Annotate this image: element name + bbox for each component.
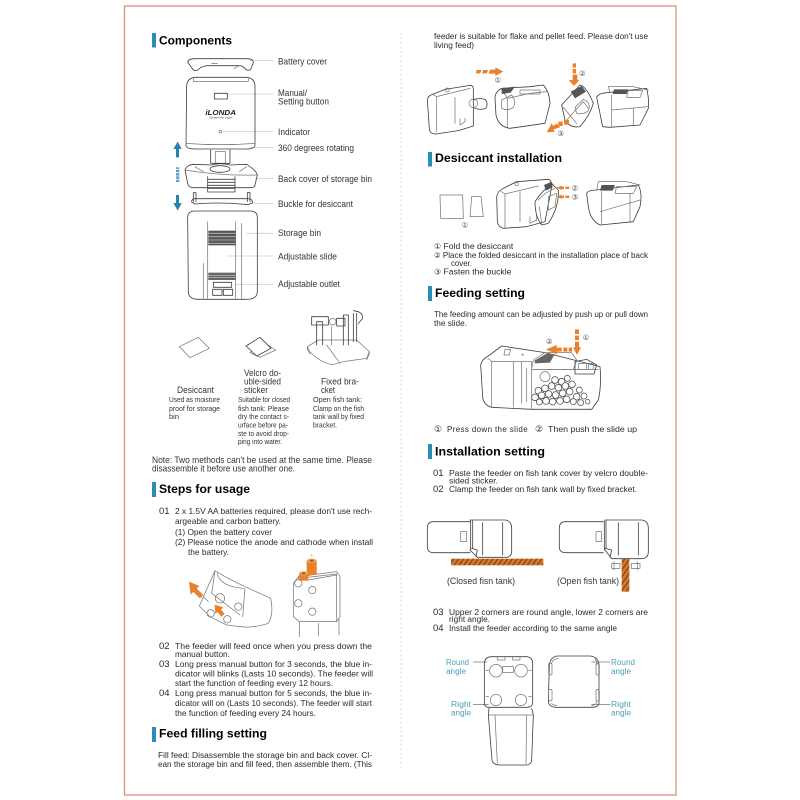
icon: batteries <box>295 553 317 581</box>
tank cover hatch <box>451 559 543 565</box>
arrows and step numbers <box>476 63 586 138</box>
steps 02 to 04 text: Long press manual button for 5 seconds, the blue in- <box>175 688 372 698</box>
arrows and step numbers: ① <box>495 76 501 85</box>
arrows and step numbers: ② <box>546 337 553 346</box>
heading: steps for usage: Steps for usage <box>159 482 250 496</box>
installation steps 03 and 04 text: Upper 2 corners are round angle, lower 2 corners are <box>449 607 648 617</box>
device assembled <box>587 182 641 225</box>
accessory: bracket text: Clamp on the fish <box>313 406 364 413</box>
angle labels left: angle <box>451 708 471 718</box>
icon: fixed bracket <box>307 311 369 365</box>
back cover part <box>185 164 257 192</box>
installation steps text: 01 <box>433 468 444 479</box>
device: cover tilted <box>562 85 593 127</box>
arrows and step numbers: ① <box>583 333 589 342</box>
component labels: Adjustable outlet <box>278 279 341 289</box>
diagram: installing batteries <box>293 553 340 637</box>
icon: orange arrows <box>189 582 225 617</box>
diagram: bracket frame with angles <box>548 656 610 707</box>
installation steps text: Paste the feeder on fish tank cover by velcro double- <box>449 468 648 478</box>
angle labels left: Round <box>446 657 469 667</box>
angle labels right: Round <box>611 657 635 667</box>
desiccant sheets <box>440 195 483 229</box>
arrows and step numbers: ③ <box>572 192 578 201</box>
feed filling text continued: feeder is suitable for flake and pellet feed. Please don't use <box>434 31 648 41</box>
feed pellets <box>532 375 590 406</box>
desiccant steps text: ③ Fasten the buckle <box>434 266 512 276</box>
device: assembled cover <box>597 87 649 127</box>
desiccant steps text: ① Fold the desiccant <box>434 241 514 251</box>
device: bin <box>427 85 487 134</box>
component labels: Indicator <box>278 127 310 137</box>
feeding steps text <box>434 424 637 434</box>
diagram: closed fish tank mounting <box>427 520 543 565</box>
icon: velcro sticker <box>246 337 276 357</box>
accessory: velcro text: uble-sided <box>244 376 281 386</box>
arrows and step numbers: ② <box>579 69 586 78</box>
heading: desiccant installation: Desiccant installation <box>435 151 562 165</box>
accessory: bracket text: cket <box>321 385 335 395</box>
accessories illustrations <box>179 311 369 365</box>
label: open tank: (Open fish tank) <box>557 576 619 586</box>
feed filling text continued <box>434 31 648 50</box>
steps 02 to 04 text: The feeder will feed once when you press down the <box>175 641 372 651</box>
icon: batteries: + <box>311 553 314 558</box>
note text <box>152 454 372 474</box>
accessory: velcro text: dry the contact s- <box>238 414 290 421</box>
feed filling text: ean the storage bin and fill feed, then assemble them. (This <box>158 759 372 769</box>
buckle part <box>192 193 253 205</box>
diagram: open fish tank mounting <box>559 520 648 592</box>
arrows and step numbers <box>557 183 578 201</box>
accessory: desiccant text: Used as moisture <box>169 397 220 404</box>
steps 02 to 04 text: dicator will blinks (Lasts 10 seconds). The feeder will <box>175 668 373 678</box>
step 01 text: 2 x 1.5V AA batteries required, please don't use rech- <box>175 506 372 516</box>
feeding setting text: The feeding amount can be adjusted by push up or pull down <box>434 309 648 319</box>
feed filling text continued: living feed) <box>434 40 474 50</box>
step 01 text: (1) Open the battery cover <box>175 527 272 537</box>
component labels: Back cover of storage bin <box>278 174 372 184</box>
desiccant sheets: ① <box>462 220 468 229</box>
feed filling text <box>158 750 372 769</box>
main body part <box>186 77 255 149</box>
accessory: velcro text: urface before pa- <box>238 422 289 430</box>
component labels: 360 degrees rotating <box>278 143 354 153</box>
heading: feed filling setting: Feed filling setting <box>159 726 267 740</box>
diagram: exploded view of feeder <box>173 59 273 299</box>
accessory: desiccant text: proof for storage <box>169 406 220 413</box>
accessory: desiccant text <box>169 385 220 421</box>
heading: components: Components <box>159 34 232 48</box>
angle labels left: angle <box>446 666 466 676</box>
angle labels left <box>446 657 472 718</box>
feeding steps text: ② <box>535 424 543 434</box>
steps 02 to 04 text: manual button. <box>175 649 230 659</box>
accessory: desiccant text: bin <box>169 414 179 421</box>
storage bin part <box>188 211 257 299</box>
step 01 text: 01 <box>159 506 170 517</box>
brand logo: Smart life style <box>209 116 233 120</box>
angle labels right <box>611 657 635 718</box>
installation steps 03 and 04 text <box>433 607 648 634</box>
installation steps text <box>433 468 648 495</box>
accessory: velcro text: sticker <box>244 385 268 395</box>
accessory: velcro text: Velcro do- <box>244 368 281 378</box>
component labels: Manual/ <box>278 88 308 98</box>
steps 02 to 04 text: Long press manual button for 3 seconds, the blue in- <box>175 659 372 669</box>
installation steps text: sided sticker. <box>449 476 498 486</box>
arrows and step numbers: ③ <box>557 129 564 138</box>
note text: Note: Two methods can't be used at the same time. Please <box>152 454 372 465</box>
heading: installation setting: Installation setting <box>435 444 545 458</box>
accessory: bracket text <box>313 376 364 430</box>
diagram: feeding slide cutaway <box>481 329 601 409</box>
angle labels right: angle <box>611 666 631 676</box>
installation steps text: Clamp the feeder on fish tank wall by fixed bracket. <box>449 484 637 494</box>
desiccant steps text <box>434 241 649 276</box>
diagram: opening battery cover <box>189 571 272 627</box>
feeding steps text: ① <box>434 424 442 434</box>
steps 02 to 04 text: dicator will on (Lasts 10 seconds). The feeder will start <box>175 698 373 708</box>
feeding steps text: Press down the slide <box>447 424 528 434</box>
brand logo: iLONDA <box>205 108 236 117</box>
device with desiccant <box>497 179 558 228</box>
step 01 text: argeable and carbon battery. <box>175 516 281 526</box>
diagram: feed filling sequence <box>427 63 649 138</box>
component labels <box>278 56 372 289</box>
steps 02 to 04 text: the function of feeding every 24 hours. <box>175 708 316 718</box>
icon: arrows up and down <box>173 142 182 211</box>
desiccant steps text: ② Place the folded desiccant in the installation place of back <box>434 250 649 260</box>
accessory: bracket text: bracket. <box>313 422 337 430</box>
component labels: Setting button <box>278 96 329 106</box>
label: closed tank: (Closed fisn tank) <box>447 576 515 586</box>
installation steps text: 02 <box>433 484 444 495</box>
icon: desiccant sheet <box>179 337 209 358</box>
battery cover part <box>188 59 253 71</box>
accessory: velcro text: ste to avoid drop- <box>238 431 290 438</box>
accessory: velcro text: fish tank: Please <box>238 406 289 413</box>
icon: batteries: - <box>295 567 297 572</box>
installation steps 03 and 04 text: 04 <box>433 623 444 634</box>
installation steps 03 and 04 text: right angle. <box>449 614 490 624</box>
installation steps 03 and 04 text: Install the feeder according to the same angle <box>449 623 617 633</box>
angle labels left: Right <box>451 699 472 709</box>
heading: feeding setting: Feeding setting <box>435 286 525 300</box>
diagram: back of feeder with angles <box>473 657 533 765</box>
diagram: desiccant installation <box>440 179 641 229</box>
accessory: velcro text <box>238 368 290 446</box>
component labels: Buckle for desiccant <box>278 199 354 209</box>
arrows and step numbers <box>546 329 589 355</box>
angle labels right: Right <box>611 699 632 709</box>
component labels: Adjustable slide <box>278 252 337 262</box>
feeding steps text: Then push the slide up <box>548 424 637 434</box>
arrows and step numbers: ② <box>572 183 578 192</box>
accessory: desiccant text: Desiccant <box>177 385 214 395</box>
rotating neck <box>211 150 230 163</box>
red page frame <box>124 6 676 795</box>
angle labels right: angle <box>611 708 631 718</box>
feeding setting text <box>434 309 648 328</box>
steps 02 to 04 text: 02 <box>159 641 170 652</box>
step 01 text <box>159 506 373 557</box>
installation steps 03 and 04 text: 03 <box>433 607 444 618</box>
feeding setting text: the slide. <box>434 318 467 328</box>
desiccant steps text: cover. <box>451 258 472 268</box>
accessory: bracket text: Open fish tank: <box>313 397 362 404</box>
component labels: Storage bin <box>278 228 321 238</box>
note text: disassemble it before use another one. <box>152 462 295 474</box>
steps 02 to 04 text: start the function of feeding every 12 hours. <box>175 678 333 688</box>
component labels: Battery cover <box>278 56 327 66</box>
accessory: bracket text: Fixed bra- <box>321 376 359 386</box>
steps 02 to 04 text: 03 <box>159 659 170 670</box>
tank wall hatch <box>622 559 629 592</box>
steps 02 to 04 text <box>159 641 373 718</box>
feed filling text: Fill feed: Disassemble the storage bin and back cover. Cl- <box>158 750 372 760</box>
accessory: bracket text: tank wall by fixed <box>313 414 364 421</box>
steps 02 to 04 text: 04 <box>159 688 170 699</box>
accessory: velcro text: ping into water. <box>238 439 282 446</box>
device: back cover open <box>495 85 550 128</box>
step 01 text: the battery. <box>188 547 229 557</box>
step 01 text: (2) Please notice the anode and cathode when install <box>175 537 373 547</box>
accessory: velcro text: Suitable for closed <box>238 397 290 404</box>
